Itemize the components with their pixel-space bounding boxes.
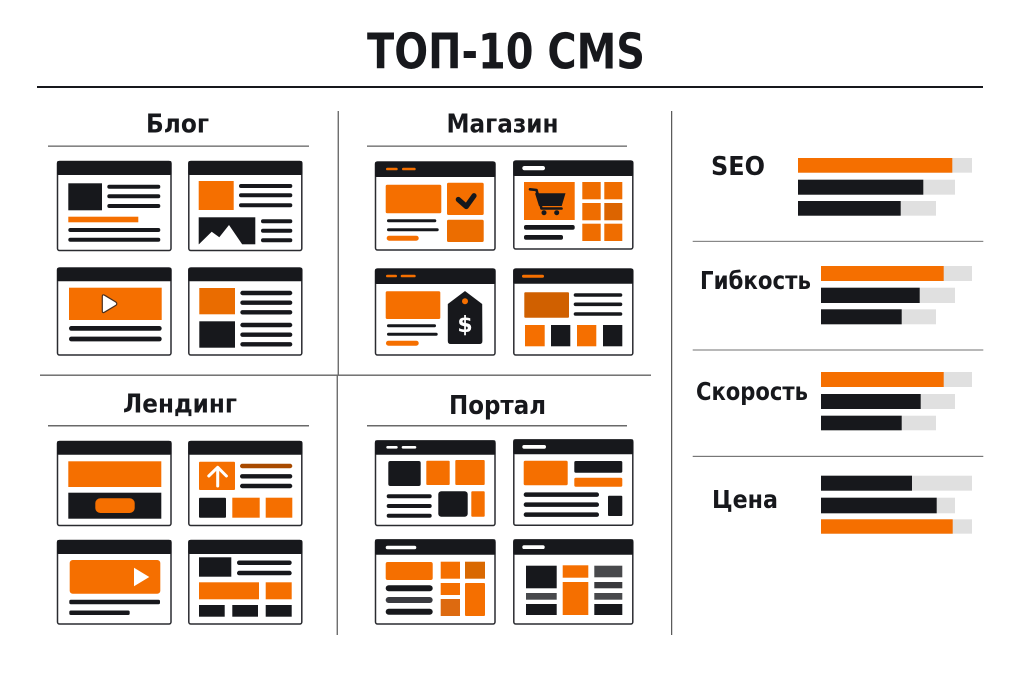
icon: check mark [458, 196, 474, 206]
card: blog video [57, 268, 172, 355]
chart: SEO: SEO [711, 152, 765, 182]
icon: up arrow [209, 467, 226, 486]
card: shop price tag [375, 269, 496, 355]
icon: shopping cart [530, 189, 566, 215]
chart: SEO [711, 152, 972, 216]
icon: play [102, 295, 117, 313]
chart: Скорость: Скорость [696, 377, 808, 406]
card: portal grid [375, 539, 496, 624]
card: shop cart [513, 161, 633, 249]
card: shop catalog [513, 269, 633, 355]
chart: Гибкость: Гибкость [700, 266, 811, 295]
panel: criteria [693, 152, 983, 534]
panel: Магазин [367, 110, 633, 355]
chart: Скорость [696, 372, 972, 430]
card: landing hero [57, 441, 172, 526]
card: landing blocks [188, 540, 302, 624]
heading: Лендинг: Лендинг [123, 390, 237, 420]
panel: Блог [48, 110, 309, 355]
card: portal article [513, 439, 633, 525]
chart: Цена: Цена [712, 485, 778, 514]
card: landing video [57, 540, 172, 624]
card: blog article [57, 161, 172, 250]
card: shop checkout [375, 162, 496, 250]
card: blog list [188, 268, 302, 355]
heading: Блог: Блог [146, 110, 209, 140]
chart: Цена [712, 476, 972, 534]
chart: Гибкость [700, 266, 972, 324]
card: landing upload [188, 441, 302, 526]
heading: Портал: Портал [449, 391, 546, 421]
panel: Лендинг [48, 390, 309, 624]
panel: Портал [367, 391, 633, 624]
heading: Магазин: Магазин [446, 110, 558, 140]
card: blog image [188, 161, 302, 250]
card: portal mosaic [375, 440, 496, 526]
icon: price tag: $ [457, 313, 473, 338]
card: portal columns [513, 539, 633, 624]
title: ТОП-10 CMS [367, 23, 645, 80]
